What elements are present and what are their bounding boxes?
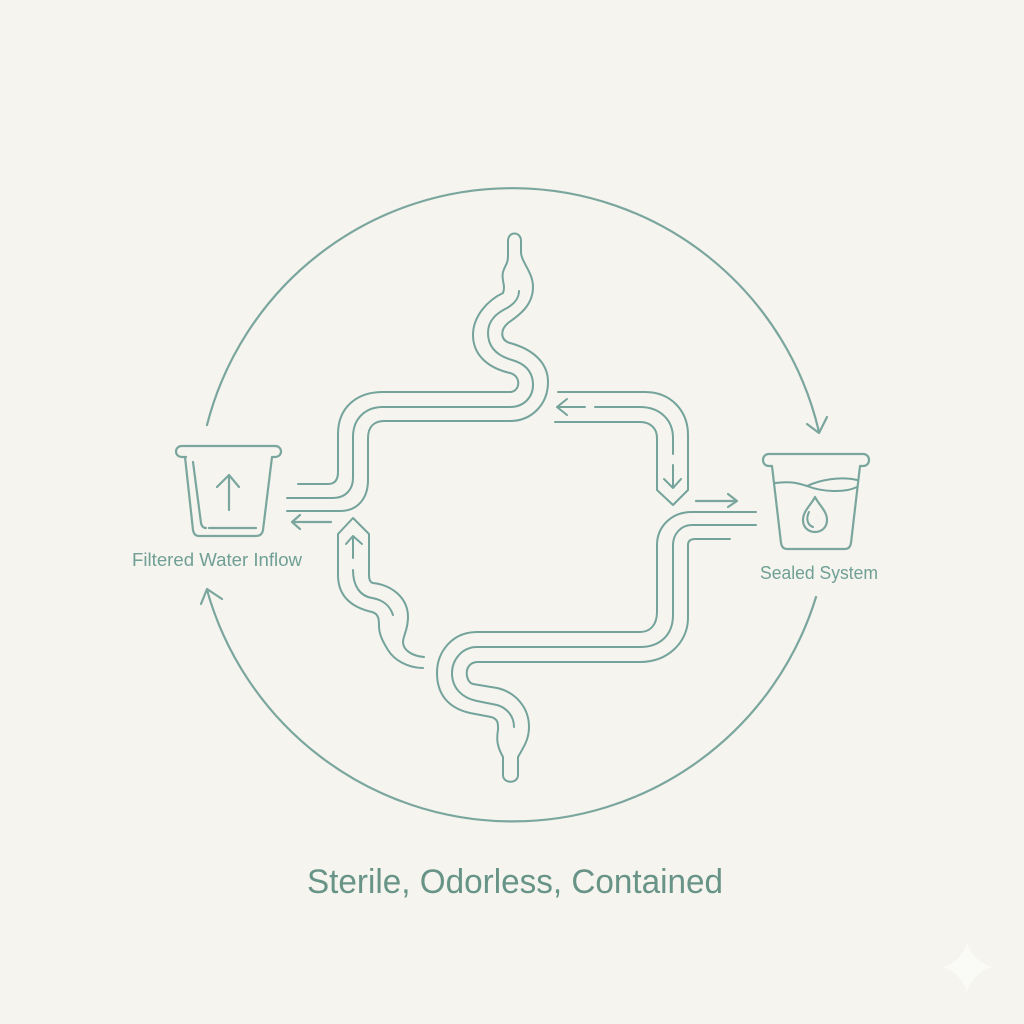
lower-left pipe with arrow tip (338, 518, 424, 668)
top-right pipe with arrow tip (555, 392, 688, 505)
icon: water drop (803, 497, 827, 532)
label: Filtered Water Inflow: Filtered Water Inflow (132, 550, 303, 570)
bucket: sealed system with water (763, 454, 869, 549)
cycle arc: top, from inflow to sealed system (207, 188, 827, 433)
top serpentine pipe (287, 234, 548, 511)
arrow: toward sealed system (696, 494, 737, 507)
water surface (775, 478, 857, 491)
title: Sterile, Odorless, Contained: Sterile, Odorless, Contained (307, 863, 723, 901)
cycle arc: bottom, from sealed system to inflow (201, 589, 816, 821)
icon: faint sparkle (943, 943, 992, 992)
lower serpentine pipe (437, 512, 756, 782)
bucket: filtered water inflow (176, 446, 281, 536)
label: Sealed System: Sealed System (760, 563, 878, 583)
arrow: into filtered water bucket (292, 515, 331, 529)
